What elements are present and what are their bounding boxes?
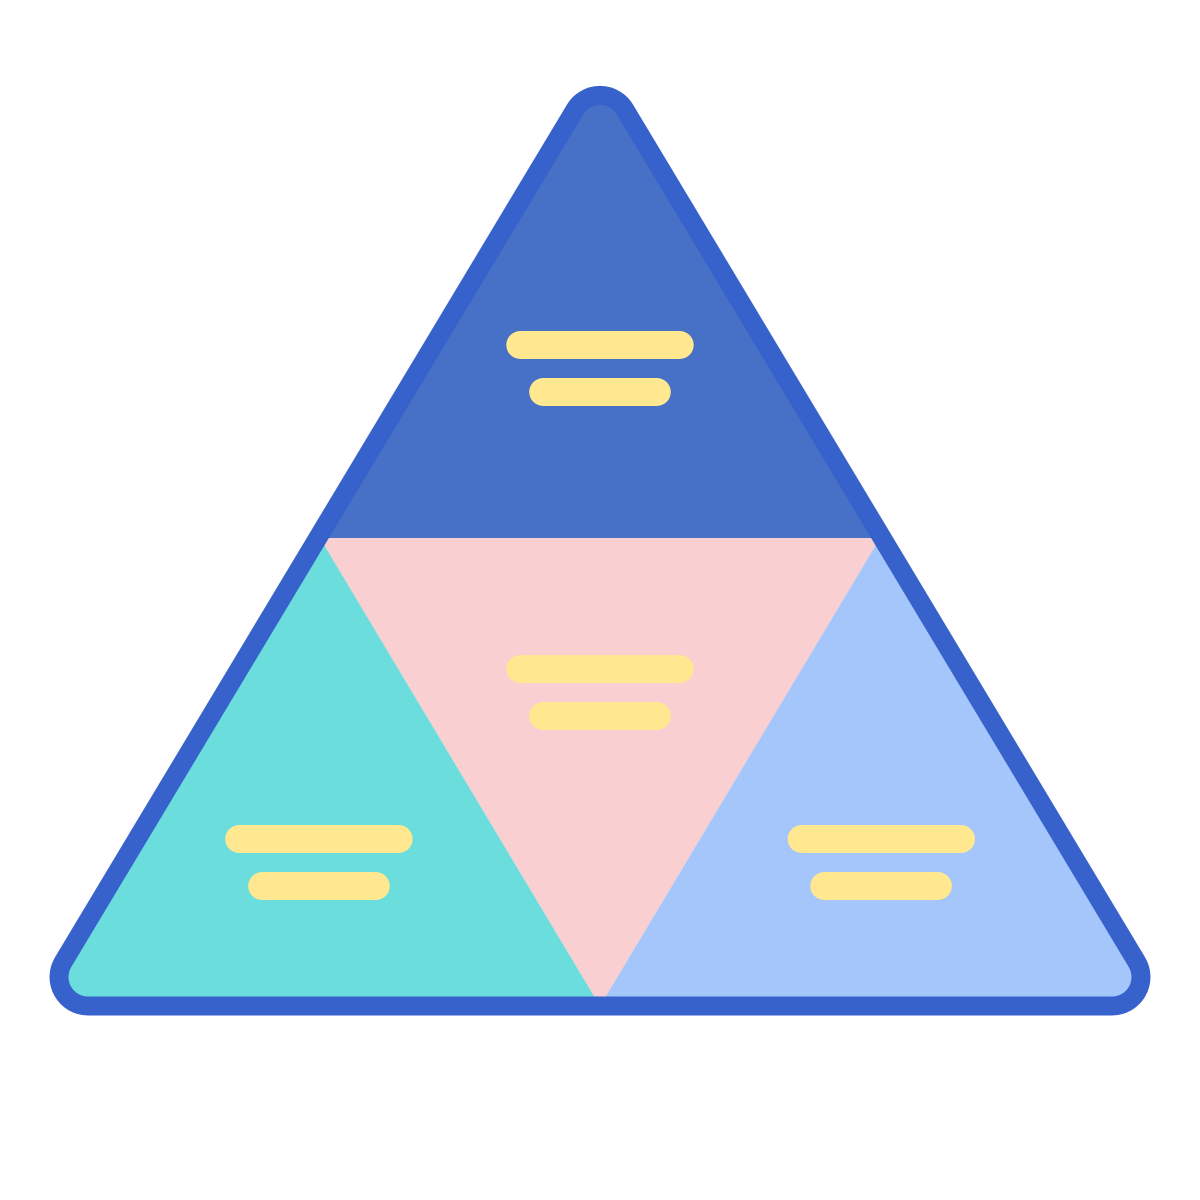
text placeholder: left <box>225 825 413 900</box>
panel: center inverted triangle <box>320 538 880 1006</box>
panel: bottom right triangle <box>606 546 1132 996</box>
triangle diagram <box>50 86 1150 1016</box>
text placeholder: center <box>506 655 694 730</box>
triangle outline <box>59 95 1141 1006</box>
text placeholder: right <box>788 825 975 900</box>
panel: top triangle <box>329 104 871 538</box>
text placeholder: top <box>506 331 694 406</box>
panel: bottom left triangle <box>68 546 594 996</box>
